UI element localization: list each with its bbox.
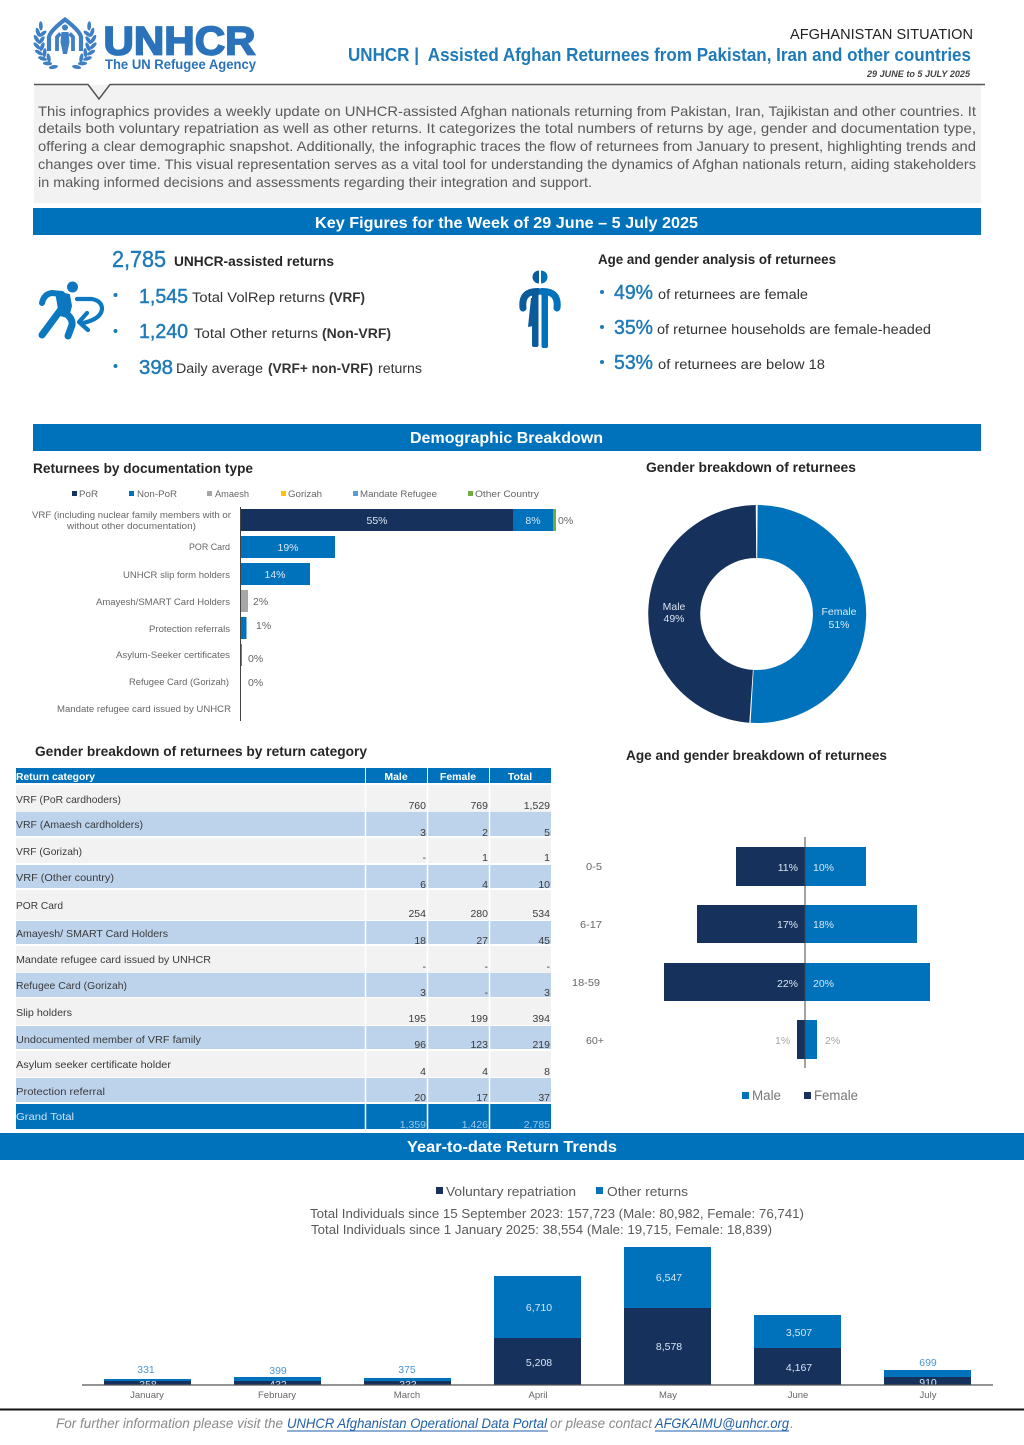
table rows: 3 bbox=[420, 827, 426, 839]
population pyramid chart: 18% bbox=[813, 919, 834, 931]
donut chart bbox=[648, 505, 866, 723]
table rows: 96 bbox=[414, 1039, 426, 1051]
bar chart: documentation: Asylum-Seeker certificates bbox=[116, 650, 230, 661]
logo: UNHCR: The UN Refugee Agency bbox=[105, 57, 256, 72]
key figures: returns: returns bbox=[378, 361, 422, 376]
key figures: age and gender analysis: of returnee households are female-headed bbox=[657, 322, 931, 337]
key figures: returns: 398 bbox=[139, 357, 173, 379]
key figures: returns bbox=[112, 246, 422, 379]
key figures: returns: Daily average bbox=[176, 361, 263, 376]
chart legend bbox=[72, 489, 539, 500]
table rows: Amayesh/ SMART Card Holders bbox=[16, 928, 168, 940]
chart legend: PoR bbox=[79, 489, 98, 500]
population pyramid chart: 20% bbox=[813, 978, 834, 990]
bar chart: documentation: 2% bbox=[253, 596, 268, 608]
population pyramid chart: 2% bbox=[825, 1035, 840, 1047]
panel: introduction: in making informed decisions and assessments regarding their integration and support. bbox=[38, 174, 592, 190]
stacked bar chart: monthly returns: 6,710 bbox=[526, 1302, 552, 1314]
icon: UNHCR emblem bbox=[32, 20, 98, 70]
bar chart: documentation: VRF (including nuclear family members with or bbox=[32, 510, 231, 521]
table rows: 45 bbox=[538, 935, 550, 947]
bar chart: documentation: 14% bbox=[264, 569, 286, 581]
table rows: 4 bbox=[420, 1066, 426, 1078]
table rows: - bbox=[422, 852, 426, 864]
table rows: Slip holders bbox=[16, 1007, 72, 1019]
footer: AFGKAIMU@unhcr.org bbox=[654, 1415, 789, 1431]
panel: introduction: offering a clear demographic snapshot. Additionally, the infographic traces the flow of returnees from January to present, highlighting trends and bbox=[38, 138, 976, 154]
key figures: returns: (Non-VRF) bbox=[322, 326, 391, 341]
stacked bar chart: monthly returns: January bbox=[130, 1390, 164, 1401]
table rows: 18 bbox=[414, 935, 426, 947]
footer: or please contact bbox=[550, 1415, 653, 1431]
panel: gender breakdown of returnees: Gender breakdown of returnees bbox=[646, 459, 856, 475]
chart legend: Non-PoR bbox=[137, 489, 177, 500]
stacked bar chart: monthly returns: 5,208 bbox=[526, 1357, 552, 1369]
bar chart: documentation: Protection referrals bbox=[149, 624, 230, 635]
footer: . bbox=[790, 1415, 794, 1431]
table rows: 1 bbox=[544, 852, 550, 864]
population pyramid chart: 0-5 bbox=[586, 861, 602, 873]
key figures: returns: (VRF) bbox=[329, 290, 365, 305]
population pyramid chart: 22% bbox=[777, 978, 798, 990]
header text block: 29 JUNE to 5 JULY 2025 bbox=[866, 69, 971, 79]
bar chart: documentation: 55% bbox=[366, 515, 388, 527]
panel: introduction: This infographics provides a weekly update on UNHCR-assisted Afghan nationals returning from Pakistan, Iran, Tajikistan and other countries. It bbox=[38, 103, 976, 119]
key figures: age and gender analysis bbox=[598, 251, 931, 374]
bar chart: documentation: Refugee Card (Gorizah) bbox=[129, 677, 229, 688]
key figures: returns: (VRF+ non-VRF) bbox=[268, 361, 373, 376]
heading: year-to-date return trends: Year-to-date Return Trends bbox=[407, 1139, 617, 1156]
panel: gender breakdown by return category bbox=[16, 743, 551, 1131]
key figures: returns: UNHCR-assisted returns bbox=[174, 253, 334, 269]
donut chart: Male bbox=[663, 601, 686, 613]
table bbox=[16, 768, 551, 1131]
heading: year-to-date return trends bbox=[0, 1133, 1024, 1160]
donut chart: Female bbox=[821, 606, 857, 618]
chart legend: Mandate Refugee bbox=[360, 489, 437, 500]
table rows: 2 bbox=[482, 827, 488, 839]
header text block: UNHCR | Assisted Afghan Returnees from Pakistan, Iran and other countries bbox=[348, 44, 971, 65]
table rows: VRF (Gorizah) bbox=[16, 846, 82, 858]
panel: introduction bbox=[34, 84, 985, 203]
trends legend bbox=[436, 1184, 689, 1199]
key figures: age and gender analysis: 49% bbox=[614, 282, 653, 304]
footer: For further information please visit the bbox=[56, 1415, 283, 1431]
table rows: 254 bbox=[408, 908, 426, 920]
panel: gender breakdown of returnees bbox=[646, 459, 866, 723]
table rows: 17 bbox=[476, 1092, 488, 1104]
stacked bar chart: monthly returns: July bbox=[920, 1390, 937, 1401]
footer bbox=[0, 1408, 1024, 1432]
key figures: age and gender analysis: 53% bbox=[614, 352, 653, 374]
table rows: - bbox=[484, 961, 488, 973]
table rows: 8 bbox=[544, 1066, 550, 1078]
table rows: Protection referral bbox=[16, 1086, 105, 1098]
heading: demographic breakdown bbox=[33, 424, 981, 451]
logo: UNHCR: UNHCR bbox=[104, 20, 256, 64]
stacked bar chart: monthly returns: March bbox=[394, 1390, 420, 1401]
logo: UNHCR bbox=[32, 20, 256, 72]
stacked bar chart: monthly returns: April bbox=[528, 1390, 548, 1401]
panel: returnees by documentation type bbox=[32, 460, 573, 721]
bar chart: documentation: 0% bbox=[248, 653, 263, 665]
panel: introduction: details both voluntary repatriation as well as other returns. It categorizes the total numbers of returns by age, gender and documentation type, bbox=[38, 120, 976, 136]
stacked bar chart: monthly returns: 333 bbox=[399, 1379, 417, 1391]
population pyramid chart bbox=[572, 837, 930, 1068]
stacked bar chart: monthly returns: 699 bbox=[919, 1357, 937, 1369]
heading: demographic breakdown: Demographic Breakdown bbox=[410, 430, 603, 447]
stacked bar chart: monthly returns: 399 bbox=[269, 1365, 287, 1377]
population pyramid chart: 17% bbox=[777, 919, 798, 931]
table rows bbox=[16, 794, 550, 1104]
table rows: VRF (Amaesh cardholders) bbox=[16, 819, 143, 831]
icon: returning person bbox=[42, 282, 102, 336]
table header: Return category bbox=[16, 771, 95, 783]
stacked bar chart: monthly returns: 375 bbox=[398, 1364, 416, 1376]
table header: Male bbox=[384, 771, 408, 783]
population pyramid chart: 10% bbox=[813, 862, 834, 874]
grand total row: 1,426 bbox=[462, 1119, 488, 1131]
stacked bar chart: monthly returns bbox=[82, 1247, 993, 1401]
stacked bar chart: monthly returns: 331 bbox=[137, 1364, 155, 1376]
grand total row: Grand Total bbox=[16, 1111, 74, 1123]
panel: age and gender breakdown bbox=[572, 747, 930, 1103]
trends totals text: Total Individuals since 15 September 2023: 157,723 (Male: 80,982, Female: 76,741) bbox=[310, 1206, 804, 1221]
table header: Total bbox=[508, 771, 532, 783]
heading: key figures: Key Figures for the Week of 29 June – 5 July 2025 bbox=[315, 215, 698, 232]
panel: returnees by documentation type: Returnees by documentation type bbox=[33, 460, 253, 476]
chart legend: Gorizah bbox=[288, 489, 322, 500]
table rows: 769 bbox=[470, 800, 488, 812]
header text block bbox=[348, 27, 973, 79]
table rows: 4 bbox=[482, 1066, 488, 1078]
chart legend: Amaesh bbox=[215, 489, 249, 500]
key figures: age and gender analysis: of returnees are below 18 bbox=[658, 357, 825, 372]
table rows: 3 bbox=[420, 987, 426, 999]
panel: gender breakdown by return category: Gender breakdown of returnees by return category bbox=[35, 743, 367, 759]
table rows: VRF (PoR cardhoders) bbox=[16, 794, 121, 806]
key figures: age and gender analysis: 35% bbox=[614, 317, 653, 339]
grand total row bbox=[16, 1112, 550, 1129]
panel: age and gender breakdown: Age and gender breakdown of returnees bbox=[626, 747, 887, 763]
heading: key figures bbox=[33, 208, 981, 235]
key figures: returns: 1,545 bbox=[139, 286, 188, 308]
table header bbox=[16, 768, 551, 783]
population pyramid chart: 18-59 bbox=[572, 977, 600, 989]
header text block: AFGHANISTAN SITUATION bbox=[790, 27, 973, 43]
key figures: age and gender analysis: of returnees are female bbox=[658, 287, 808, 302]
table rows: Mandate refugee card issued by UNHCR bbox=[16, 954, 211, 966]
table rows: 3 bbox=[544, 987, 550, 999]
table rows: 27 bbox=[476, 935, 488, 947]
grand total row: 2,785 bbox=[524, 1119, 550, 1131]
table rows: 195 bbox=[408, 1013, 426, 1025]
table rows: Undocumented member of VRF family bbox=[16, 1034, 202, 1046]
key figures: returns: 1,240 bbox=[139, 321, 188, 343]
bar chart: documentation: POR Card bbox=[189, 542, 230, 553]
table rows: Refugee Card (Gorizah) bbox=[16, 980, 127, 992]
footer: UNHCR Afghanistan Operational Data Portal bbox=[287, 1415, 548, 1431]
pyramid legend: Female bbox=[814, 1088, 858, 1103]
table rows: 394 bbox=[532, 1013, 550, 1025]
trends totals text bbox=[310, 1206, 804, 1237]
population pyramid chart: 1% bbox=[775, 1035, 790, 1047]
population pyramid chart: 6-17 bbox=[580, 919, 602, 931]
panel: introduction: changes over time. This visual representation serves as a vital tool for understanding the dynamics of Afghan nationals return, aiding stakeholders bbox=[38, 156, 976, 172]
table rows: - bbox=[484, 987, 488, 999]
bar chart: documentation: 1% bbox=[256, 620, 271, 632]
table rows: 5 bbox=[544, 827, 550, 839]
pyramid legend bbox=[742, 1088, 858, 1103]
donut chart: 51% bbox=[828, 619, 850, 631]
donut chart: 49% bbox=[663, 613, 685, 625]
stacked bar chart: monthly returns: 6,547 bbox=[656, 1272, 682, 1284]
grand total row: 1,359 bbox=[400, 1119, 426, 1131]
icon: male and female figure bbox=[523, 270, 557, 348]
bar chart: documentation bbox=[32, 507, 573, 721]
table rows: POR Card bbox=[16, 900, 63, 912]
stacked bar chart: monthly returns: February bbox=[258, 1390, 296, 1401]
key figures: returns: 2,785 bbox=[112, 246, 166, 272]
stacked bar chart: monthly returns: 4,167 bbox=[786, 1362, 812, 1374]
table rows: - bbox=[422, 961, 426, 973]
bar chart: documentation: Mandate refugee card issued by UNHCR bbox=[57, 704, 231, 715]
key figures: age and gender analysis: Age and gender analysis of returnees bbox=[598, 251, 836, 267]
table rows: 123 bbox=[470, 1039, 488, 1051]
table rows: 534 bbox=[532, 908, 550, 920]
stacked bar chart: monthly returns: 432 bbox=[269, 1379, 287, 1391]
table rows: 219 bbox=[532, 1039, 550, 1051]
table rows: - bbox=[546, 961, 550, 973]
table header: Female bbox=[440, 771, 476, 783]
table rows: 20 bbox=[414, 1092, 426, 1104]
pyramid legend: Male bbox=[752, 1088, 781, 1103]
stacked bar chart: monthly returns: 8,578 bbox=[656, 1341, 682, 1353]
table rows: 4 bbox=[482, 879, 488, 891]
trends legend: Voluntary repatriation bbox=[446, 1184, 576, 1199]
bar chart: documentation: UNHCR slip form holders bbox=[123, 570, 230, 581]
bar chart: documentation: without other documentation) bbox=[66, 521, 196, 532]
stacked bar chart: monthly returns: May bbox=[659, 1390, 677, 1401]
table rows: Asylum seeker certificate holder bbox=[16, 1059, 172, 1071]
bar chart: documentation: 8% bbox=[525, 515, 541, 527]
population pyramid chart: 60+ bbox=[586, 1035, 604, 1047]
table rows: 280 bbox=[470, 908, 488, 920]
table rows: 6 bbox=[420, 879, 426, 891]
table rows: 10 bbox=[538, 879, 550, 891]
table rows: 199 bbox=[470, 1013, 488, 1025]
bar chart: documentation: 19% bbox=[277, 542, 299, 554]
key figures: returns: Total Other returns bbox=[194, 326, 318, 341]
key figures: returns: Total VolRep returns bbox=[192, 290, 325, 305]
bar chart: documentation: 0% bbox=[248, 677, 263, 689]
bar chart: documentation: Amayesh/SMART Card Holders bbox=[96, 597, 230, 608]
stacked bar chart: monthly returns: 358 bbox=[139, 1379, 157, 1391]
stacked bar chart: monthly returns: 3,507 bbox=[786, 1327, 812, 1339]
table rows: VRF (Other country) bbox=[16, 872, 114, 884]
table rows: 1 bbox=[482, 852, 488, 864]
trends totals text: Total Individuals since 1 January 2025: 38,554 (Male: 19,715, Female: 18,839) bbox=[311, 1222, 772, 1237]
table rows: 37 bbox=[538, 1092, 550, 1104]
population pyramid chart: 11% bbox=[778, 862, 798, 874]
table rows: 760 bbox=[408, 800, 426, 812]
bar chart: documentation: 0% bbox=[558, 515, 573, 527]
stacked bar chart: monthly returns: 910 bbox=[919, 1377, 937, 1389]
stacked bar chart: monthly returns: June bbox=[788, 1390, 808, 1401]
table rows: 1,529 bbox=[524, 800, 550, 812]
chart legend: Other Country bbox=[475, 489, 539, 500]
trends legend: Other returns bbox=[607, 1184, 689, 1199]
